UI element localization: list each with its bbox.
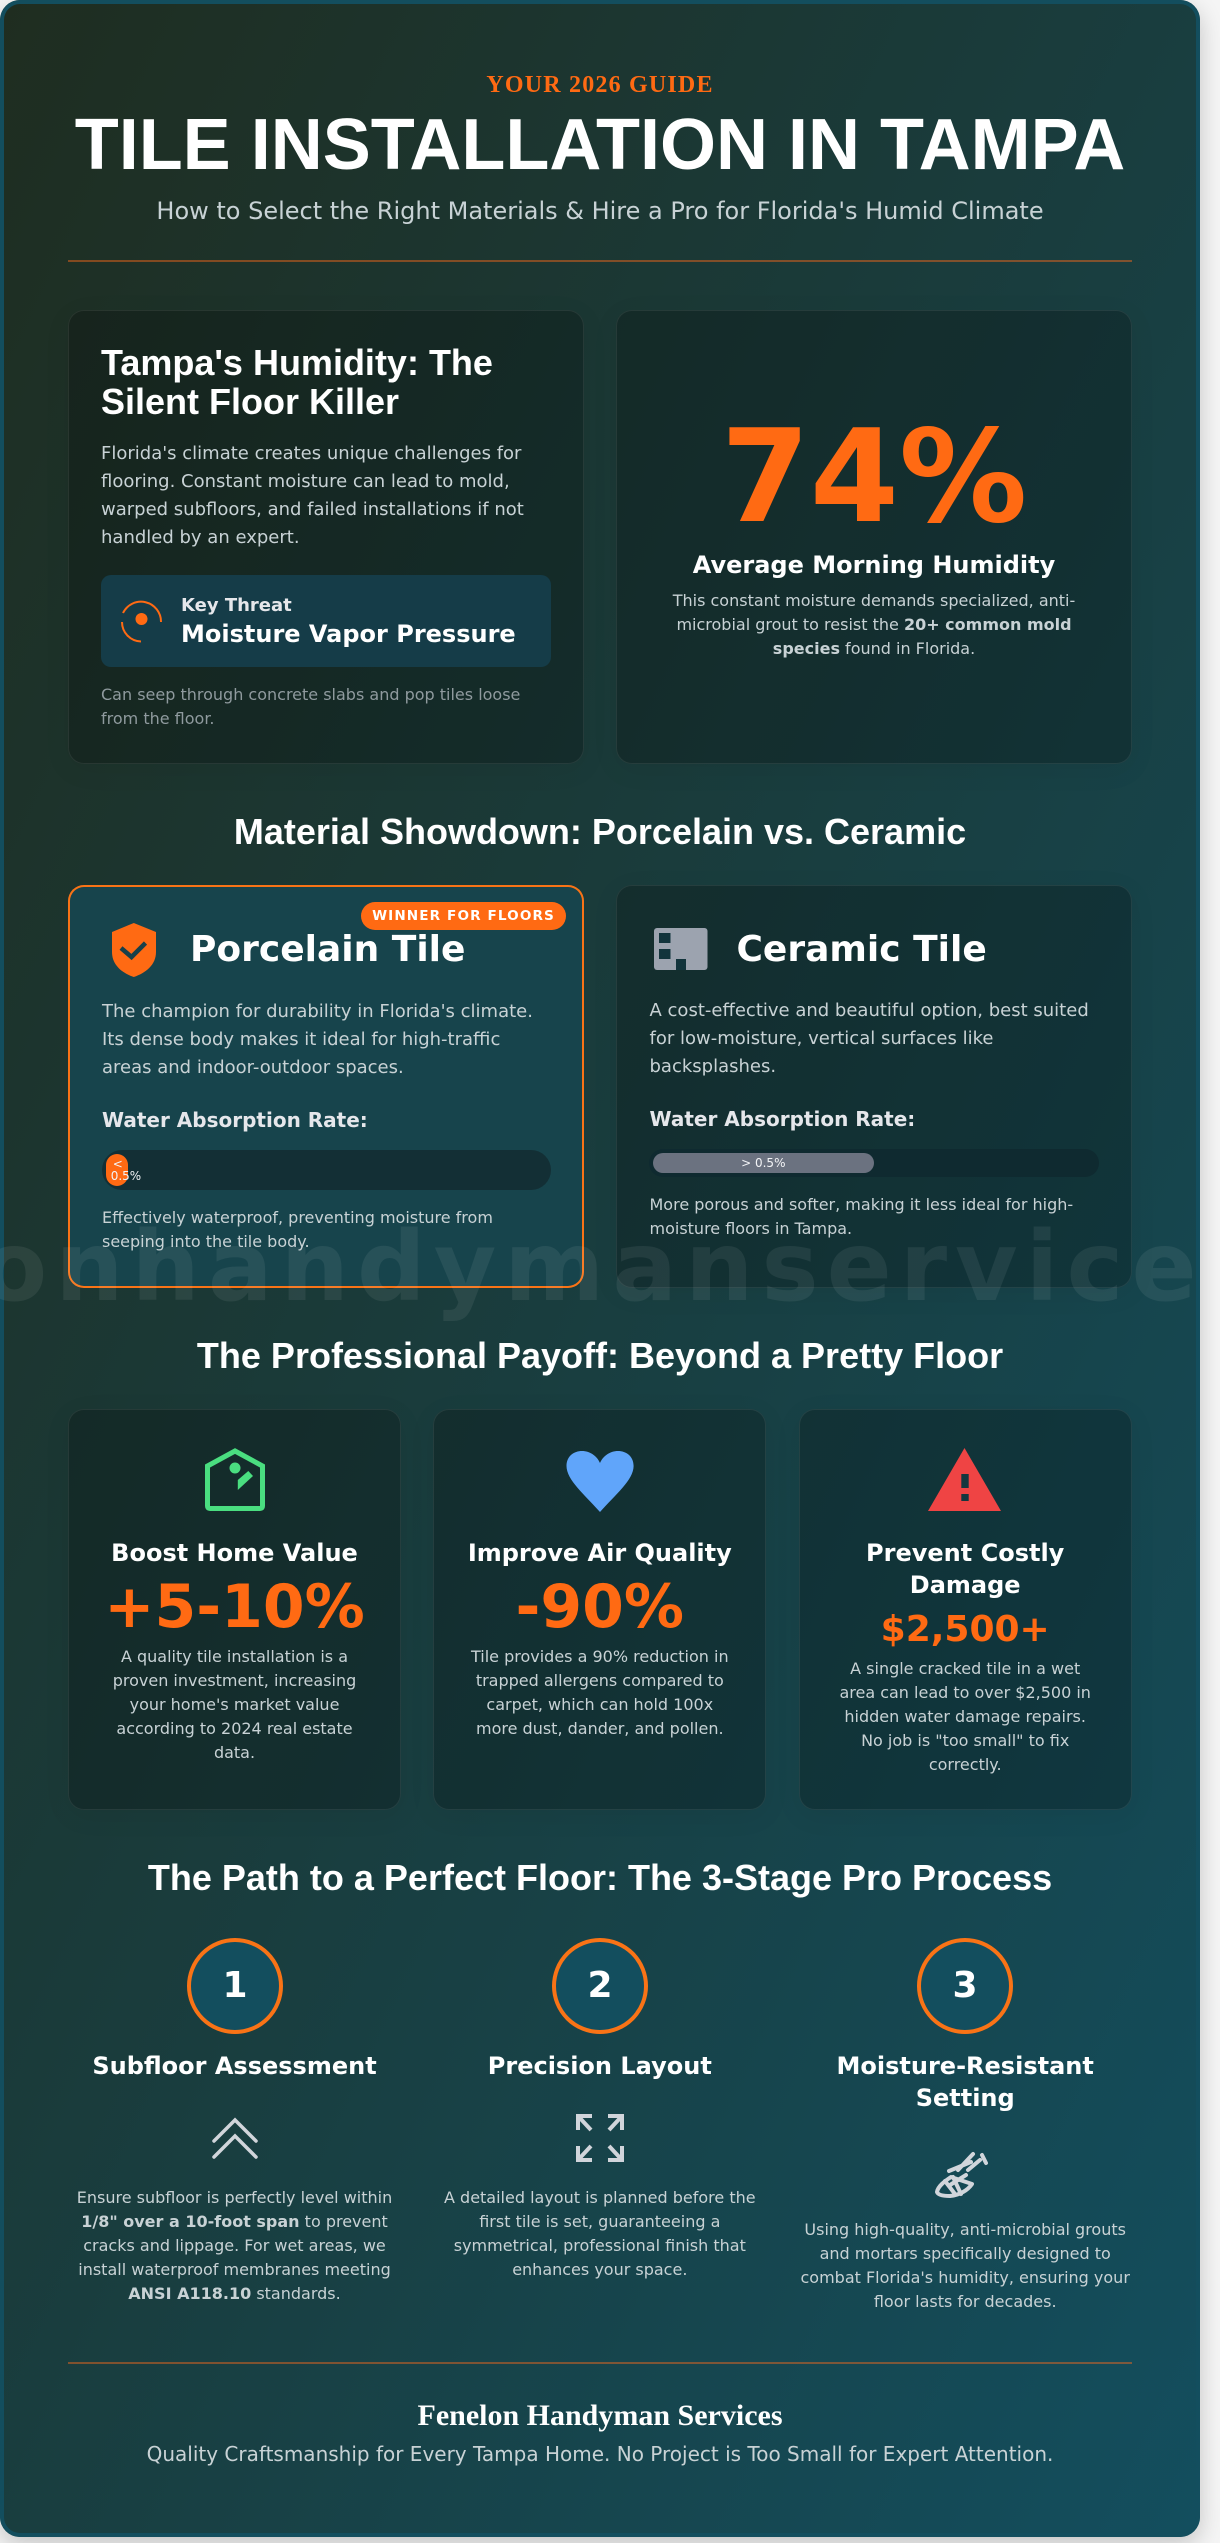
benefit text: carpet, which can hold 100x: [486, 1694, 713, 1714]
step number: [552, 1938, 648, 2034]
icon: expand arrows: [576, 2114, 624, 2162]
icon: chevrons: [212, 2118, 258, 2159]
step text: install waterproof membranes meeting: [78, 2260, 391, 2278]
step number: [187, 1938, 283, 2034]
benefit title: Prevent Costly: [866, 1539, 1064, 1567]
absorption note: [650, 1194, 1073, 1238]
step text: Using high-quality, anti-microbial grouts: [804, 2220, 1126, 2238]
panel: home value: [68, 1409, 401, 1810]
stat description: species found in Florida.: [773, 639, 975, 658]
tile description: backsplashes.: [650, 1056, 776, 1077]
benefit value: -90%: [516, 1572, 684, 1642]
panel heading: [101, 342, 493, 422]
benefit value: $2,500+: [881, 1609, 1050, 1650]
benefit title: Boost Home Value: [111, 1539, 358, 1567]
absorption note: seeping into the tile body.: [102, 1232, 310, 1250]
intro text: flooring. Constant moisture can lead to mold,: [101, 470, 510, 492]
step text: ANSI A118.10 standards.: [128, 2284, 341, 2302]
absorption note: More porous and softer, making it less ideal for high-: [650, 1194, 1073, 1214]
footer brand: Fenelon Handyman Services: [418, 2399, 782, 2432]
bar value: 0.5%: [111, 1169, 141, 1183]
bar value: [111, 1157, 141, 1183]
absorption note: [102, 1208, 493, 1250]
absorption bar: [649, 1149, 1099, 1177]
icon: house: [205, 1448, 265, 1511]
benefit text: more dust, dander, and pollen.: [476, 1718, 724, 1738]
step text: 1/8" over a 10-foot span to prevent: [81, 2212, 388, 2230]
icon: shield: [112, 923, 156, 977]
bar fill and value: [653, 1153, 874, 1173]
key threat callout: [101, 575, 551, 667]
step 2: [444, 1938, 756, 2278]
step text: A detailed layout is planned before the: [444, 2188, 756, 2206]
benefit text: according to 2024 real estate: [116, 1718, 353, 1738]
absorption label: Water Absorption Rate:: [102, 1108, 368, 1132]
step number: 2: [587, 1965, 613, 2006]
icon: heart: [566, 1451, 634, 1512]
stat value: 74%: [721, 403, 1027, 552]
icon: warning: [928, 1448, 1001, 1511]
threat note: from the floor.: [101, 708, 215, 728]
key threat value: Moisture Vapor Pressure: [181, 620, 516, 648]
step title: [837, 2052, 1094, 2112]
panel heading: Tampa's Humidity: The: [101, 342, 493, 383]
intro text: handled by an expert.: [101, 526, 300, 548]
threat note: Can seep through concrete slabs and pop tiles loose: [101, 684, 520, 704]
badge: [361, 902, 566, 930]
step text: Ensure subfloor is perfectly level within: [77, 2188, 392, 2206]
benefit value: +5-10%: [104, 1572, 365, 1642]
step number: [917, 1938, 1013, 2034]
benefit text: data.: [214, 1742, 255, 1762]
stat description: [672, 591, 1075, 658]
footer tagline: Quality Craftsmanship for Every Tampa Home. No Project is Too Small for Expert Attention.: [147, 2442, 1053, 2466]
tile name: Porcelain Tile: [190, 928, 465, 970]
tile description: for low-moisture, vertical surfaces like: [650, 1028, 993, 1049]
benefit title: Improve Air Quality: [468, 1539, 732, 1567]
absorption note: moisture floors in Tampa.: [650, 1218, 852, 1238]
intro text: [101, 442, 524, 548]
absorption bar: [102, 1150, 550, 1190]
benefit text: hidden water damage repairs.: [844, 1706, 1086, 1726]
tile description: [650, 1000, 1089, 1077]
threat note: [101, 684, 520, 728]
tile description: areas and indoor-outdoor spaces.: [102, 1057, 404, 1078]
tile description: The champion for durability in Florida's climate.: [102, 1001, 533, 1022]
badge: WINNER FOR FLOORS: [372, 908, 555, 924]
benefit text: [839, 1658, 1091, 1774]
icon: moisture target: [121, 600, 162, 642]
intro text: warped subfloors, and failed installations if not: [101, 498, 524, 520]
tile description: [102, 1001, 533, 1078]
benefit text: trapped allergens compared to: [476, 1670, 724, 1690]
intro text: Florida's climate creates unique challenges for: [101, 442, 521, 464]
panel: air quality: [433, 1409, 766, 1810]
absorption note: Effectively waterproof, preventing moisture from: [102, 1208, 493, 1226]
panel: prevent damage: [799, 1409, 1132, 1810]
benefit text: area can lead to over $2,500 in: [839, 1682, 1091, 1702]
step number: 3: [952, 1965, 978, 2006]
benefit text: correctly.: [929, 1754, 1002, 1774]
heading: process: The Path to a Perfect Floor: The 3-Stage Pro Process: [148, 1856, 1052, 1898]
key threat label: Key Threat: [181, 595, 292, 616]
stat label: Average Morning Humidity: [693, 551, 1055, 579]
panel: humidity intro: [68, 310, 584, 764]
step title: Setting: [916, 2084, 1015, 2112]
tile description: Its dense body makes it ideal for high-traffic: [102, 1029, 500, 1050]
step 3: [800, 1938, 1130, 2310]
tile description: A cost-effective and beautiful option, best suited: [650, 1000, 1089, 1021]
step text: [800, 2220, 1130, 2310]
panel: humidity stat: [616, 310, 1132, 764]
benefit text: Tile provides a 90% reduction in: [471, 1646, 729, 1666]
benefit text: [470, 1646, 729, 1738]
tile name: Ceramic Tile: [736, 928, 987, 970]
step title: Moisture-Resistant: [837, 2052, 1094, 2080]
step title: Precision Layout: [488, 2052, 712, 2080]
step text: [444, 2188, 756, 2278]
panel heading: Silent Floor Killer: [101, 381, 399, 422]
heading: material showdown: Material Showdown: Porcelain vs. Ceramic: [234, 811, 966, 852]
eyebrow: YOUR 2026 GUIDE: [486, 72, 714, 98]
step text: symmetrical, professional finish that: [454, 2236, 746, 2254]
icon: tile: [654, 928, 708, 970]
stat description: microbial grout to resist the 20+ common mold: [676, 615, 1072, 634]
heading: professional payoff: The Professional Payoff: Beyond a Pretty Floor: [197, 1335, 1003, 1376]
step text: cracks and lippage. For wet areas, we: [83, 2236, 386, 2254]
bar fill: [106, 1154, 128, 1186]
panel: ceramic tile: [616, 885, 1132, 1288]
step number: 1: [222, 1965, 248, 2006]
benefit text: proven investment, increasing: [113, 1670, 356, 1690]
step title: Subfloor Assessment: [92, 2052, 377, 2080]
step text: first tile is set, guaranteeing a: [479, 2212, 720, 2230]
benefit text: A single cracked tile in a wet: [850, 1658, 1080, 1678]
bar value: <: [113, 1157, 123, 1171]
stat description: This constant moisture demands specialized, anti-: [673, 591, 1075, 610]
subtitle: How to Select the Right Materials & Hire a Pro for Florida's Humid Climate: [156, 197, 1044, 225]
benefit title: [866, 1539, 1064, 1599]
benefit title: Damage: [910, 1571, 1021, 1599]
step text: and mortars specifically designed to: [820, 2244, 1111, 2262]
step 1: [77, 1938, 392, 2302]
icon: trowel: [935, 2152, 988, 2198]
bar fill and value: > 0.5%: [741, 1156, 785, 1170]
step text: enhances your space.: [512, 2260, 687, 2278]
step text: combat Florida's humidity, ensuring your: [800, 2268, 1130, 2286]
title: TILE INSTALLATION IN TAMPA: [75, 105, 1125, 185]
step text: [77, 2188, 392, 2302]
benefit text: [113, 1646, 356, 1762]
absorption label: Water Absorption Rate:: [650, 1107, 915, 1131]
step text: floor lasts for decades.: [874, 2292, 1057, 2310]
panel: porcelain tile: [68, 885, 584, 1288]
benefit text: No job is "too small" to fix: [861, 1730, 1069, 1750]
benefit text: A quality tile installation is a: [121, 1646, 348, 1666]
benefit text: your home's market value: [130, 1694, 339, 1714]
